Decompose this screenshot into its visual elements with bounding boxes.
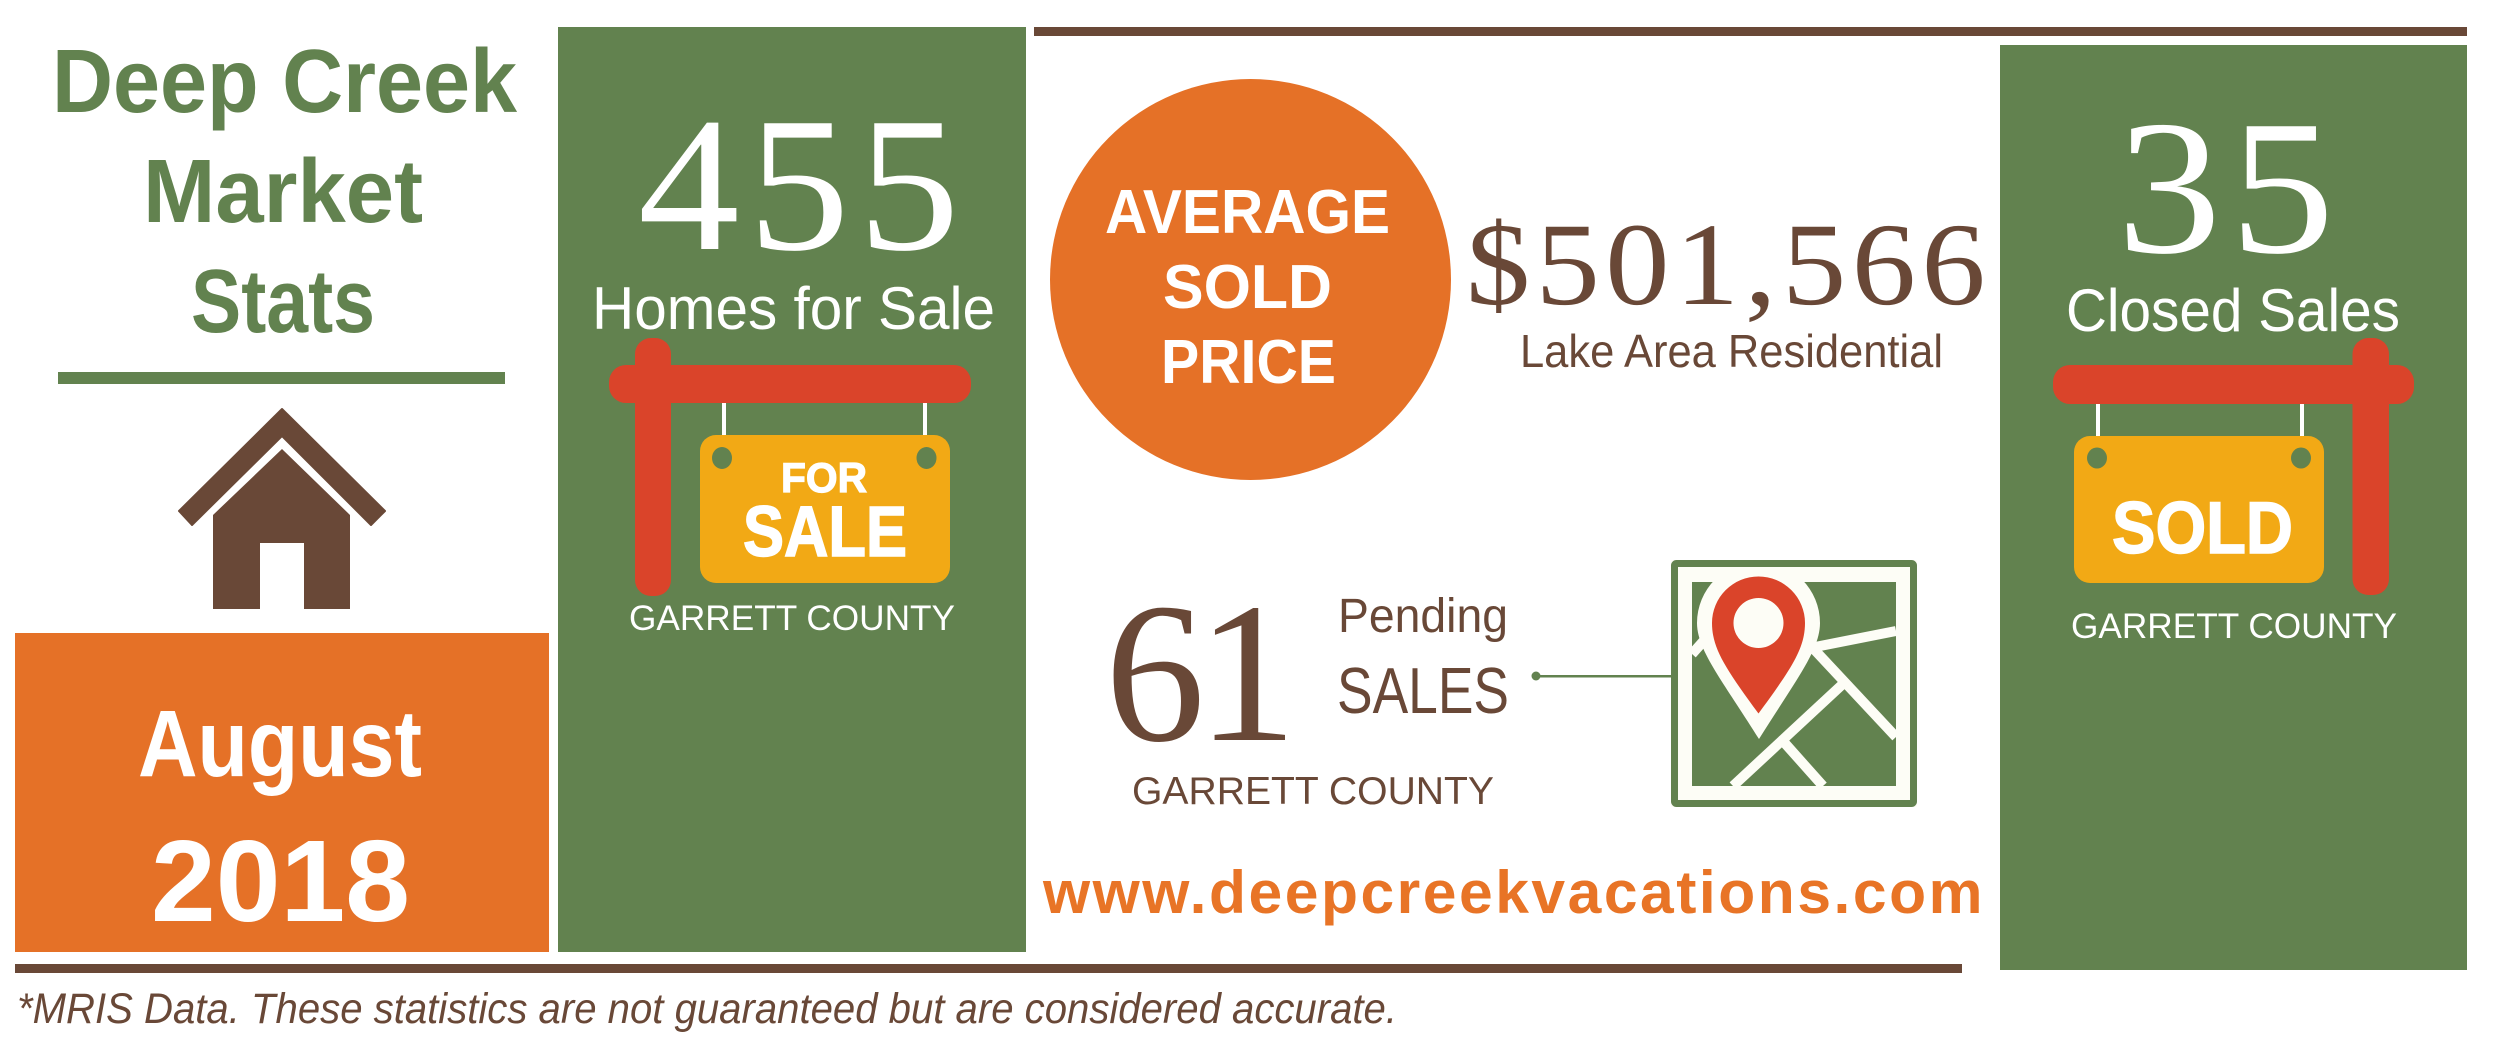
icon: for sale sign: FOR	[781, 454, 867, 501]
title: Stats	[191, 252, 375, 352]
stat: 455: 455	[638, 78, 968, 291]
homes panel background	[558, 27, 1026, 952]
date text: 2018	[151, 816, 410, 946]
circle text: SOLD	[1163, 253, 1332, 322]
date text	[138, 691, 422, 946]
date text: August	[138, 691, 422, 797]
title underline	[58, 372, 505, 384]
label: lake area residential: Lake Area Residential	[1520, 325, 1943, 377]
date background	[15, 633, 549, 952]
title: Market	[143, 142, 423, 242]
label: garrett county: GARRETT COUNTY	[2071, 607, 2397, 646]
stat: price: $501,566	[1466, 199, 1991, 330]
icon: for sale sign	[609, 338, 971, 596]
label: sales: SALES	[1337, 654, 1509, 727]
connector line	[1532, 672, 1672, 680]
label: homes for sale: Homes for Sale	[592, 275, 995, 342]
label: garrett county: GARRETT COUNTY	[1132, 770, 1494, 813]
title: Deep Creek	[52, 32, 518, 132]
top rule	[1034, 27, 2467, 36]
icon: map with pin	[1671, 560, 1917, 807]
orange circle	[1050, 79, 1451, 480]
stat: 35: 35	[2117, 81, 2343, 294]
icon: sold sign	[2053, 338, 2414, 595]
closed panel background	[2000, 45, 2467, 970]
bottom rule	[15, 964, 1962, 973]
label: pending: Pending	[1338, 590, 1508, 643]
icon: for sale sign: SALE	[743, 493, 907, 572]
icon: sold sign: SOLD	[2112, 488, 2293, 569]
panel: title column	[52, 32, 518, 609]
circle text: PRICE	[1161, 328, 1336, 397]
stat: 61: 61	[1105, 563, 1289, 784]
label: closed sales: Closed Sales	[2066, 277, 2400, 344]
title	[52, 32, 518, 352]
footnote: *MRIS Data. These statistics are not guaranteed but are considered accurate.	[17, 985, 1397, 1033]
panel: closed sales	[2000, 45, 2467, 970]
panel: homes for sale	[558, 27, 1026, 952]
website url: www.deepcreekvacations.com	[1042, 859, 1985, 926]
panel: date	[15, 633, 549, 952]
panel: pending sales	[1105, 560, 1917, 813]
circle text: AVERAGE	[1105, 178, 1390, 247]
label: garrett county: GARRETT COUNTY	[629, 599, 955, 638]
icon: house	[179, 409, 385, 609]
circle text	[1105, 178, 1390, 397]
panel: average sold price	[1050, 79, 1991, 480]
